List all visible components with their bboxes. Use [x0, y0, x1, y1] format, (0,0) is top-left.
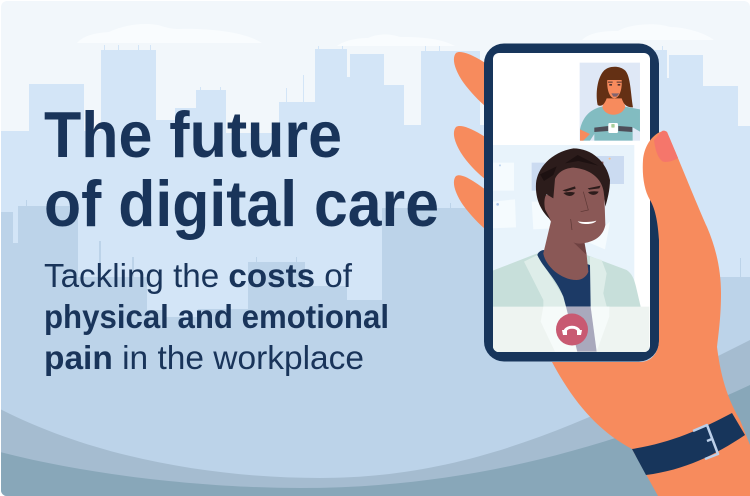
- doctor coat: [493, 253, 641, 353]
- subtitle: Tackling the costs of: [44, 257, 353, 294]
- phone screen: [493, 53, 650, 352]
- title: [44, 98, 439, 240]
- woman caller video: [580, 63, 640, 141]
- clouds: [77, 24, 714, 46]
- phone body: [484, 44, 659, 362]
- subtitle: [44, 257, 389, 376]
- far skyline: [1, 45, 750, 317]
- title: of digital care: [44, 167, 439, 240]
- doctor face: [544, 162, 605, 244]
- strap buckle: [693, 425, 718, 459]
- near skyline: [0, 200, 750, 496]
- icon: end call button: [556, 314, 588, 346]
- subtitle: physical and emotional: [44, 298, 389, 335]
- doctor video: [493, 145, 641, 353]
- doctor neck: [543, 218, 588, 280]
- doctor shirt: [537, 250, 591, 307]
- hand: [552, 131, 750, 496]
- sky: [1, 1, 750, 133]
- title: The future: [44, 98, 342, 171]
- ground front band: [0, 385, 750, 496]
- thumb nail: [654, 131, 678, 162]
- office background: [493, 145, 634, 353]
- doctor nose: [571, 192, 588, 230]
- subtitle: pain in the workplace: [44, 339, 364, 376]
- doctor hair: [536, 148, 610, 220]
- ground mid band: [0, 340, 750, 496]
- watch strap: [632, 413, 745, 475]
- icon: fingers behind phone: [454, 52, 490, 233]
- call bar: [493, 307, 649, 353]
- doctor head: [536, 148, 610, 244]
- palm and thumb: [552, 131, 750, 496]
- doctor eyes: [562, 186, 601, 192]
- doctor smile: [578, 221, 596, 224]
- phone: [484, 44, 659, 362]
